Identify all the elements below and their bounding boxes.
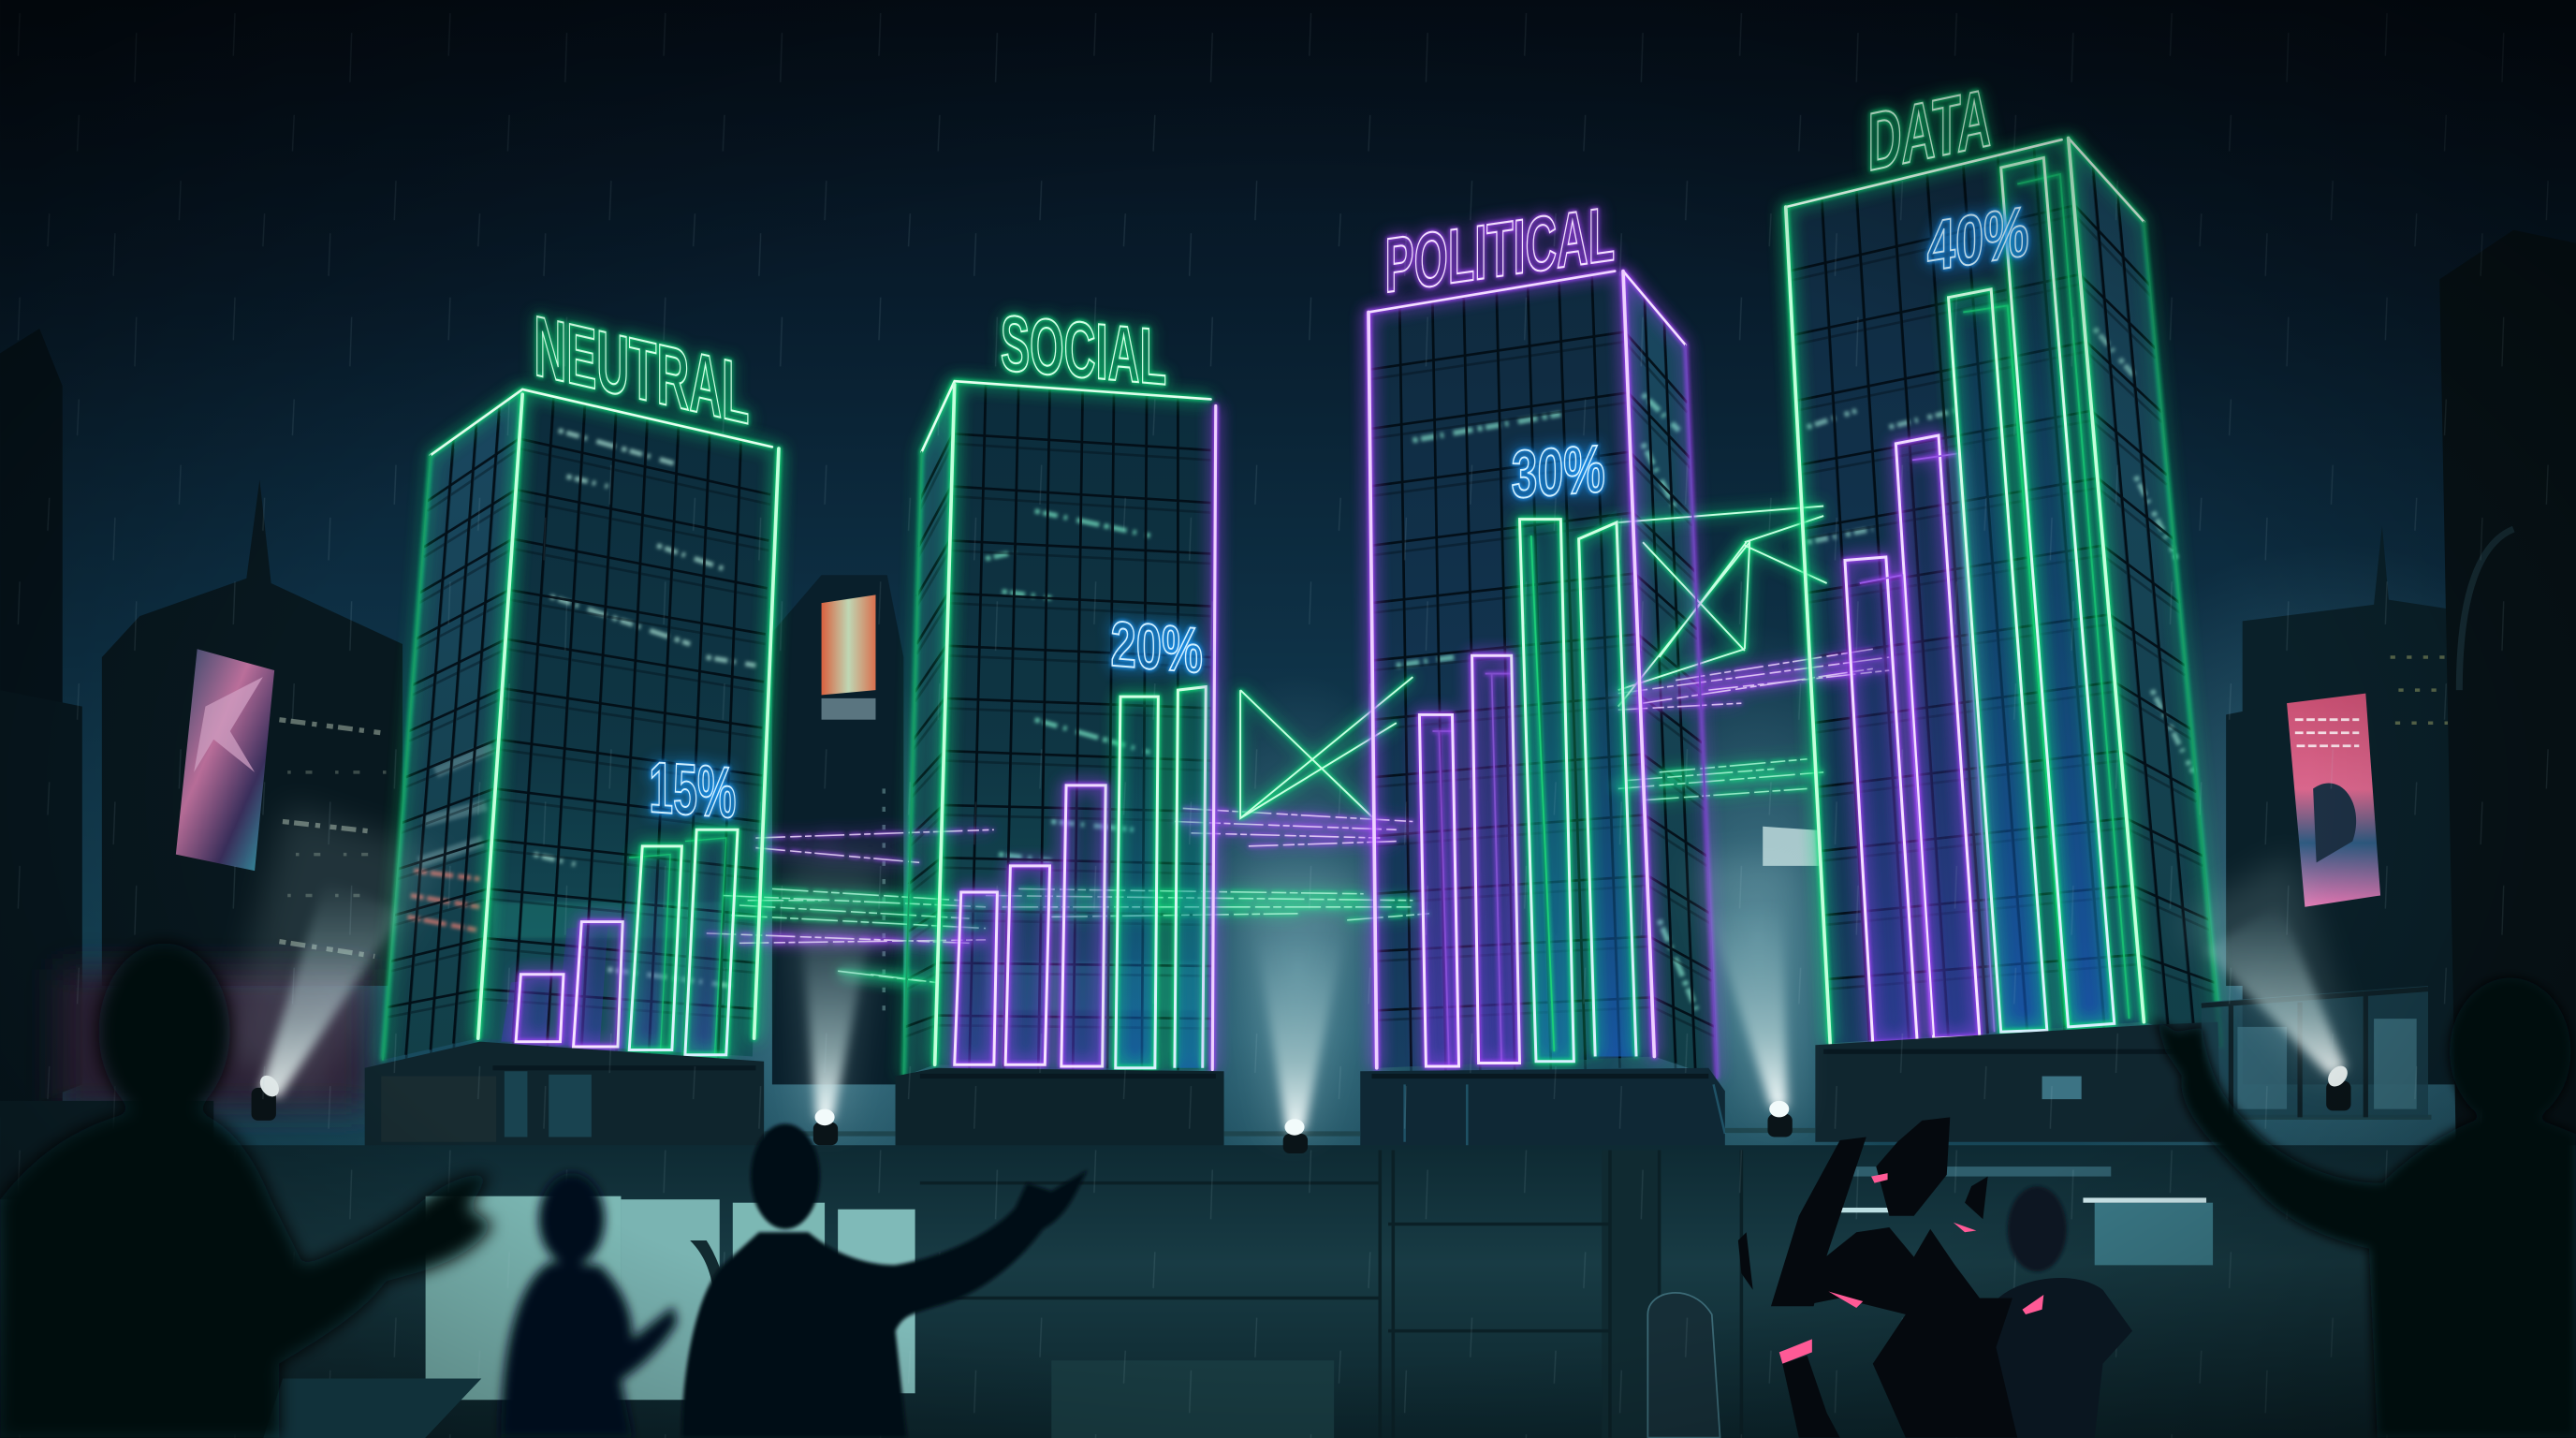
lit floors: political [1397, 394, 1701, 1019]
billboard: right tower [2287, 694, 2380, 907]
silhouette: figure with raised arm [681, 1123, 1088, 1438]
tower: neutral [383, 389, 772, 1064]
heading: DATA: DATA [1868, 71, 1991, 188]
neon edge: social right side [1212, 405, 1216, 1070]
mauve haze below the building [57, 969, 370, 1109]
bar chart: neutral 15% [501, 829, 738, 1055]
billboard: centre tower [822, 594, 875, 695]
tower: political [1368, 271, 1717, 1079]
green bars: political [1519, 520, 1636, 1062]
purple bars: political [1419, 655, 1519, 1066]
lit floors: social [986, 511, 1199, 986]
silhouette: small figure with phone [501, 1173, 677, 1438]
purple bars: neutral [516, 922, 622, 1047]
right wall lit panel and lamps [1832, 986, 2428, 1265]
heading: POLITICAL: POLITICAL [1385, 190, 1615, 309]
distant buildings left with billboard [0, 329, 402, 1117]
distant building right with billboard [2226, 230, 2576, 1151]
pipe dome [1647, 1293, 1720, 1438]
silhouette: large figure right [2156, 977, 2576, 1438]
green bars: neutral [629, 829, 738, 1055]
tower: data [1786, 138, 2221, 1049]
neon outlines: data tower [1786, 138, 2221, 1047]
neon outlines: social tower [903, 381, 1216, 1077]
ghost bars: neutral [629, 838, 726, 1055]
value: 15%: 15% [649, 747, 736, 833]
ghost bars: political [1432, 674, 1512, 1066]
dark object, lower left [263, 1378, 481, 1438]
spotlights with beams [222, 805, 2358, 1153]
value: 30%: 30% [1512, 432, 1605, 513]
bar chart: data 40% [1845, 157, 2130, 1043]
heading: NEUTRAL: NEUTRAL [534, 297, 749, 443]
silhouette: large figure left [0, 943, 493, 1438]
screen between towers three and four [1763, 827, 1835, 866]
spotlight: second [785, 855, 887, 1145]
spotlight: fourth [1692, 855, 1799, 1137]
distant building centre with billboard [772, 575, 903, 1084]
spotlight: third [1236, 871, 1364, 1153]
bright screen panels, lower left [426, 1196, 915, 1400]
lit floors: neutral [407, 431, 755, 986]
neon outlines: political tower [1368, 271, 1717, 1078]
neon outlines: neutral tower [383, 389, 779, 1060]
spotlight: left [222, 805, 444, 1121]
green bars: social [1116, 687, 1206, 1068]
heading: SOCIAL: SOCIAL [1001, 299, 1166, 402]
purple bars: social [955, 785, 1105, 1066]
tower: social [903, 381, 1212, 1079]
green bars: data [1949, 157, 2115, 1032]
value: 20%: 20% [1110, 608, 1203, 687]
tower bases [365, 1022, 2221, 1151]
lit floors: data [1808, 329, 2193, 772]
value: 40%: 40% [1927, 192, 2029, 286]
silhouette: glitching crowd right [1738, 1117, 2132, 1438]
trail glow bands [731, 661, 1889, 981]
spotlight: right [2176, 855, 2358, 1110]
fog glow behind the towers [674, 542, 2576, 1298]
purple bars: data [1845, 435, 1995, 1043]
bar chart: political 30% [1419, 509, 1636, 1066]
bar chart: social 20% [955, 687, 1206, 1068]
ghost bars: data [1963, 174, 2130, 1027]
pink glitch accents [1779, 1173, 2043, 1364]
data trails: light streams between towers [707, 506, 1889, 983]
rooftop wall [0, 1101, 2576, 1438]
billboard: left tower [176, 649, 274, 871]
